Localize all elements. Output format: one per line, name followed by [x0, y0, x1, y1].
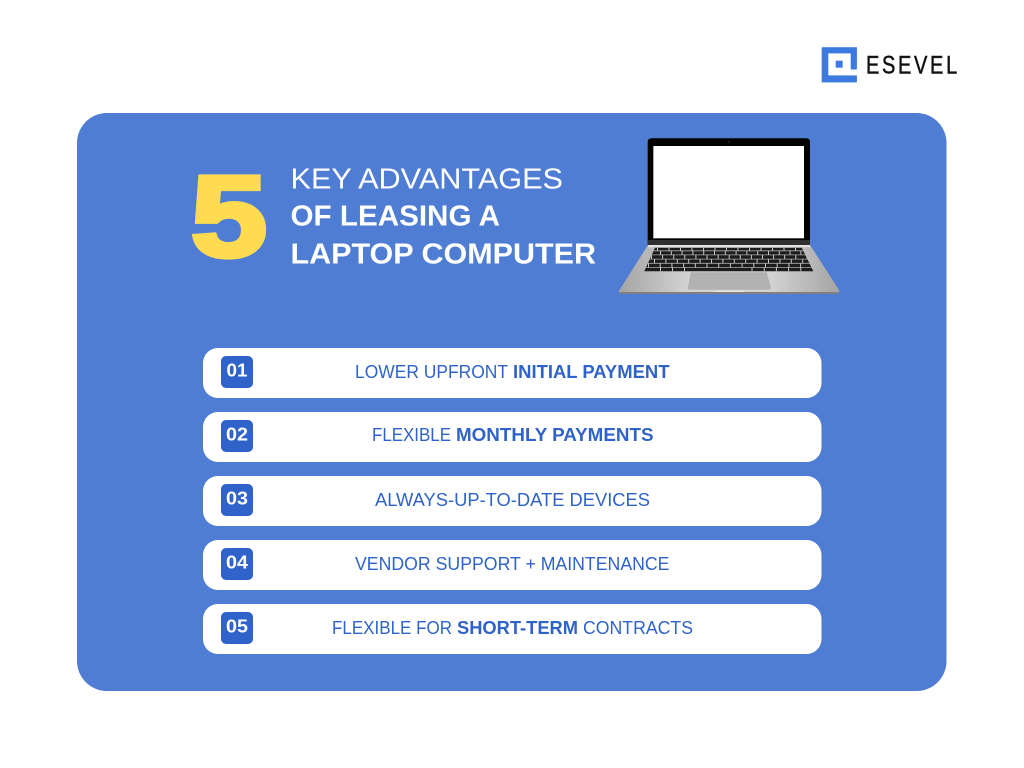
row 2 label: FLEXIBLE [372, 424, 451, 445]
row 5 label [332, 617, 693, 638]
badge 02: 02 [226, 424, 248, 444]
logo wordmark: ESEVEL [866, 51, 957, 79]
trackpad [688, 272, 771, 290]
badge 05: 05 [226, 616, 248, 636]
list row 1 [203, 348, 822, 398]
panel: main blue card [77, 113, 946, 691]
row 5 label: CONTRACTS [583, 617, 693, 638]
heading: OF LEASING A [290, 200, 500, 232]
row 3 label: ALWAYS-UP-TO-DATE DEVICES [375, 489, 650, 510]
row 5 label: FLEXIBLE FOR [332, 617, 452, 638]
heading: KEY ADVANTAGES [290, 164, 563, 196]
badge 04 [221, 548, 253, 580]
icon: logo mark [822, 47, 857, 82]
badge 03 [221, 484, 253, 516]
list row 3 [203, 476, 822, 526]
logo: Esevel [822, 47, 957, 82]
badge 01: 01 [226, 360, 248, 380]
heading [290, 164, 596, 270]
laptop screen [653, 146, 804, 238]
keyboard [640, 247, 820, 272]
row 1 label [355, 361, 670, 382]
badge 04: 04 [226, 552, 248, 572]
heading: LAPTOP COMPUTER [290, 238, 596, 270]
icon: laptop [619, 138, 839, 294]
badge 02 [221, 420, 253, 452]
laptop base [619, 245, 839, 293]
row 2 label: MONTHLY PAYMENTS [456, 424, 654, 445]
webcam [728, 141, 730, 143]
row 2 label [372, 424, 654, 445]
row 4 label: VENDOR SUPPORT + MAINTENANCE [355, 553, 670, 574]
badge 01 [221, 356, 253, 388]
laptop lid [648, 138, 810, 245]
badge 05 [221, 612, 253, 644]
big yellow number 5: 5 [191, 153, 267, 281]
row 1 label: INITIAL PAYMENT [513, 361, 670, 382]
list row 4 [203, 540, 822, 590]
row 1 label: LOWER UPFRONT [355, 361, 508, 382]
list row 2 [203, 412, 822, 462]
badge 03: 03 [226, 488, 248, 508]
row 5 label: SHORT-TERM [457, 617, 578, 638]
list row 5 [203, 604, 822, 654]
